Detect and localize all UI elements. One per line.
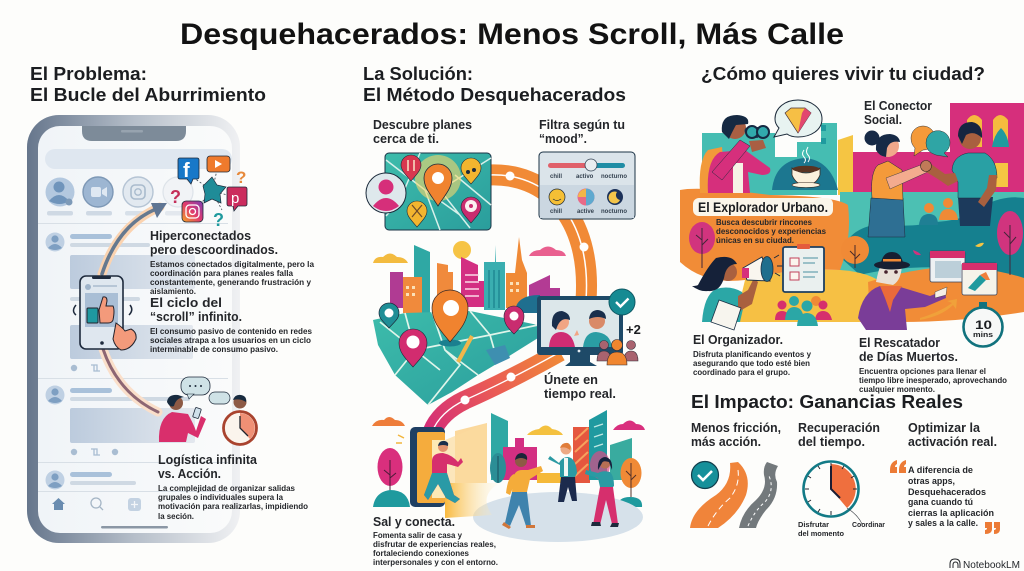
text: infinite scroll: El ciclo del bbox=[150, 295, 222, 310]
text: hyperconnected: aislamiento. bbox=[150, 286, 196, 296]
label: urban explorer bbox=[693, 198, 833, 245]
icon: social app tangle bbox=[170, 156, 247, 230]
illustration: social connector bbox=[864, 122, 997, 237]
text: logistics bbox=[158, 452, 308, 521]
text: hyperconnected: constantemente, generando frustración y bbox=[150, 277, 311, 287]
icon: social app tangle: f bbox=[183, 160, 190, 182]
mood filter card bbox=[539, 152, 635, 219]
text: rescuer: Encuentra opciones para llenar el bbox=[859, 366, 986, 376]
heading: solution bbox=[363, 64, 626, 105]
text: discover: cerca de ti. bbox=[373, 131, 439, 146]
text: organizer bbox=[693, 332, 811, 377]
text: hyperconnected: Hiperconectados bbox=[150, 228, 251, 243]
text: organizer: asegurando que todo esté bien bbox=[693, 358, 810, 368]
text: infinite scroll: “scroll” infinito. bbox=[150, 309, 242, 324]
mood filter card: nocturno bbox=[601, 174, 627, 180]
text: time recovery: Recuperación bbox=[798, 420, 880, 435]
panel: impact bbox=[690, 392, 1000, 538]
icon: check and roads bbox=[690, 462, 778, 528]
text: social connector bbox=[864, 98, 932, 127]
heading: problem: El Problema: bbox=[30, 64, 147, 84]
quote: A diferencia de bbox=[908, 465, 973, 476]
illustration: dead days rescuer: mins bbox=[973, 332, 993, 339]
heading: personas: ¿Cómo quieres vivir tu ciudad? bbox=[701, 64, 985, 84]
text: infinite scroll: sociales atrapa a los usuarios en un ciclo bbox=[150, 335, 311, 345]
panel: personas bbox=[680, 64, 1024, 394]
mood filter card: active bbox=[577, 209, 595, 215]
video call monitor: +2 bbox=[626, 322, 641, 337]
text: logistics: la seción. bbox=[158, 511, 194, 521]
text: logistics: La complejidad de organizar salidas bbox=[158, 483, 295, 493]
text: organizer: coordinado para el grupo. bbox=[693, 367, 790, 377]
text: logistics: motivación para realizarlas, impidiendo bbox=[158, 501, 308, 511]
chart: clock of recovered time: Coordinar bbox=[852, 522, 885, 529]
text: social connector: El Conector bbox=[864, 98, 932, 113]
icon: social app tangle: ? bbox=[236, 168, 246, 187]
icon: person with phone and clock bbox=[159, 377, 256, 444]
NotebookLM badge: NotebookLM bbox=[963, 559, 1020, 571]
text: less friction bbox=[691, 420, 781, 449]
text: go out and connect: disfrutar de experiencias reales, bbox=[373, 539, 496, 549]
illustration: dead days rescuer bbox=[858, 251, 1002, 346]
mood filter card: activo bbox=[576, 174, 594, 180]
heading: problem bbox=[30, 64, 266, 105]
text: optimize activation bbox=[908, 420, 997, 449]
text: rescuer: de Días Muertos. bbox=[859, 349, 958, 364]
text: go out and connect: fortaleciendo conexiones bbox=[373, 548, 469, 558]
text: organizer: Disfruta planificando eventos y bbox=[693, 349, 811, 359]
text: rescuer: tiempo libre inesperado, aprovechando bbox=[859, 375, 1007, 385]
text: join bbox=[544, 372, 616, 401]
text: optimize activation: activación real. bbox=[908, 434, 997, 449]
text: social connector: Social. bbox=[864, 112, 902, 127]
path: orange to pink road bbox=[432, 352, 560, 432]
quote: Desquehacerados bbox=[908, 487, 986, 498]
heading: problem: El Bucle del Aburrimiento bbox=[30, 85, 266, 105]
map card with pins bbox=[366, 153, 491, 230]
illustration: colourful persona backdrop bbox=[680, 103, 1024, 322]
text: discover bbox=[373, 117, 472, 146]
text: time recovery bbox=[798, 420, 880, 449]
video call monitor bbox=[537, 289, 641, 366]
icon: social app tangle: ? bbox=[213, 210, 224, 230]
quote: y sales a la calle. bbox=[908, 518, 978, 529]
text: hyperconnected: coordinación para planes reales falla bbox=[150, 268, 293, 278]
heading: solution: La Solución: bbox=[363, 64, 473, 84]
label: urban explorer: desconocidos y experiencias bbox=[716, 226, 826, 236]
chart: clock of recovered time: Disfrutar bbox=[798, 522, 829, 529]
illustration: faded phone feed bbox=[27, 115, 240, 543]
illustration: dead days rescuer: 10 bbox=[975, 318, 992, 332]
text: optimize activation: Optimizar la bbox=[908, 420, 981, 435]
path: winding orange road bbox=[488, 172, 588, 300]
text: go out and connect bbox=[373, 514, 498, 567]
text: organizer: El Organizador. bbox=[693, 332, 783, 347]
text: less friction: Menos fricción, bbox=[691, 420, 781, 435]
text: logistics: grupales o individuales supera la bbox=[158, 492, 283, 502]
label: urban explorer: Busca descubrir rincones bbox=[716, 217, 812, 227]
chart: clock of recovered time: del momento bbox=[798, 531, 844, 538]
text: filter: “mood”. bbox=[539, 131, 587, 146]
illustration: city skyline bbox=[373, 237, 566, 313]
text: infinite scroll bbox=[150, 295, 312, 354]
text: hyperconnected bbox=[150, 228, 314, 296]
panel: problem bbox=[27, 64, 314, 543]
illustration: urban explorer bbox=[700, 100, 838, 193]
text: less friction: más acción. bbox=[691, 434, 761, 449]
text: filter bbox=[539, 117, 625, 146]
text: hyperconnected: pero descoordinados. bbox=[150, 242, 278, 257]
icon: small phone with thumbs up bbox=[74, 276, 136, 350]
mood filter card: chill bbox=[550, 174, 562, 180]
text: infinite scroll: interminable de consumo pasivo. bbox=[150, 344, 278, 354]
quote: cierras la aplicación bbox=[908, 508, 994, 519]
text: filter: Filtra según tu bbox=[539, 117, 625, 132]
chart: clock of recovered time bbox=[798, 462, 885, 538]
title: Desquehacerados: Menos Scroll, Más Calle bbox=[180, 18, 844, 51]
arrow: phone to logistics bbox=[103, 349, 158, 412]
text: go out and connect: Sal y conecta. bbox=[373, 514, 455, 529]
arrow: phone to social apps bbox=[102, 203, 167, 274]
quote bbox=[890, 460, 1000, 534]
heading: impact: El Impacto: Ganancias Reales bbox=[691, 392, 963, 412]
text: logistics: Logística infinita bbox=[158, 452, 258, 467]
illustration: organizer bbox=[692, 244, 832, 330]
text: rescuer: El Rescatador bbox=[859, 335, 940, 350]
text: hyperconnected: Estamos conectados digitalmente, pero la bbox=[150, 259, 314, 269]
panel: solution bbox=[363, 64, 645, 567]
text: logistics: vs. Acción. bbox=[158, 466, 221, 481]
illustration: city map with pins bbox=[373, 290, 538, 405]
text: time recovery: del tiempo. bbox=[798, 434, 865, 449]
label: urban explorer: únicas en su ciudad. bbox=[716, 235, 794, 245]
mood filter card: nocturno bbox=[601, 209, 627, 215]
text: join: tiempo real. bbox=[544, 386, 616, 401]
quote: otras apps, bbox=[908, 476, 955, 487]
text: discover: Descubre planes bbox=[373, 117, 472, 132]
label: urban explorer: El Explorador Urbano. bbox=[698, 199, 828, 215]
text: rescuer bbox=[859, 335, 1007, 394]
quote: gana cuando tú bbox=[908, 497, 973, 508]
text: go out and connect: Fomenta salir de casa y bbox=[373, 530, 462, 540]
icon: social app tangle: ? bbox=[170, 187, 181, 207]
mood filter card: chill bbox=[550, 209, 562, 215]
icon: social app tangle: p bbox=[231, 190, 239, 207]
text: go out and connect: interpersonales y con el entorno. bbox=[373, 557, 498, 567]
text: join: Únete en bbox=[544, 372, 598, 387]
illustration: leaving the phone to meet friends bbox=[372, 410, 645, 542]
heading: solution: El Método Desquehacerados bbox=[363, 85, 626, 105]
text: infinite scroll: El consumo pasivo de contenido en redes bbox=[150, 326, 312, 336]
text: rescuer: cualquier momento. bbox=[859, 384, 935, 394]
